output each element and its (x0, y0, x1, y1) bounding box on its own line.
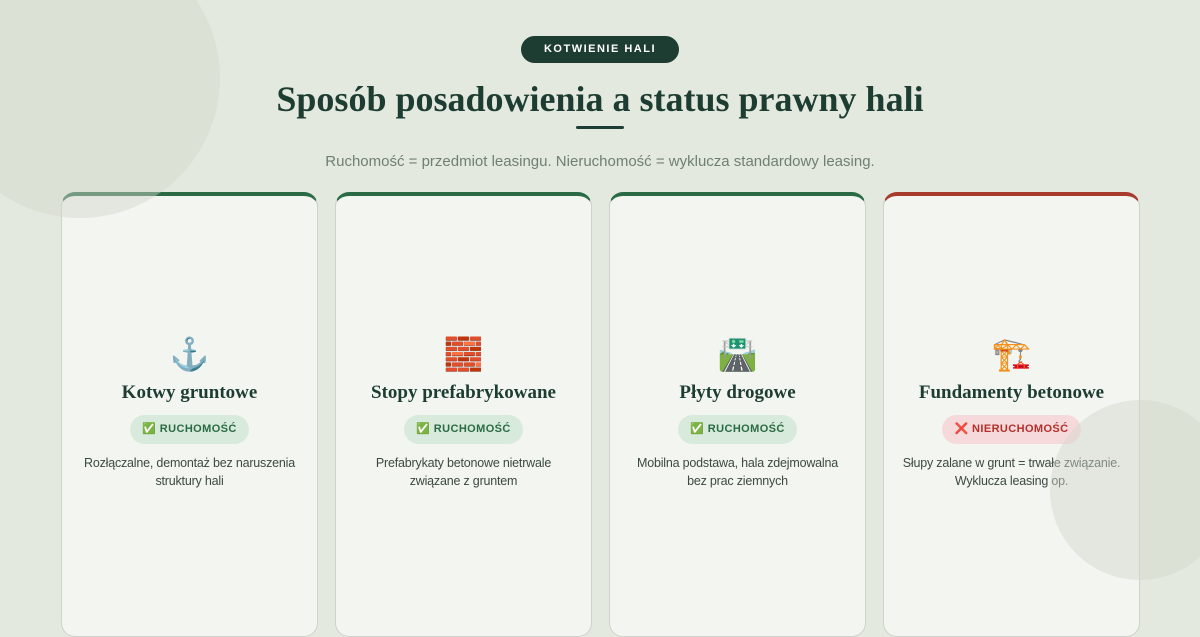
heading: Płyty drogowe (679, 382, 796, 403)
badge (678, 415, 797, 444)
badge (404, 415, 523, 444)
panel: płyty drogowe (609, 192, 866, 637)
description: Wyklucza leasing op. (955, 474, 1068, 488)
description: związane z gruntem (410, 474, 517, 488)
description (84, 456, 296, 488)
icon: road: 🛣️ (718, 336, 757, 372)
heading: Stopy prefabrykowane (371, 382, 556, 403)
description (376, 456, 551, 488)
badge: ✅ RUCHOMOŚĆ (416, 423, 511, 435)
description: Mobilna podstawa, hala zdejmowalna (637, 456, 838, 470)
heading: Fundamenty betonowe (919, 382, 1104, 403)
badge (942, 415, 1081, 444)
icon: anchor: ⚓ (170, 336, 209, 372)
title: Sposób posadowienia a status prawny hali (276, 79, 924, 119)
subtitle: Ruchomość = przedmiot leasingu. Nieruchomość = wyklucza standardowy leasing. (325, 153, 875, 170)
description: bez prac ziemnych (687, 474, 788, 488)
panel: stopy prefabrykowane (335, 192, 592, 637)
description: Rozłączalne, demontaż bez naruszenia (84, 456, 295, 470)
description: struktury hali (155, 474, 224, 488)
tag pill (521, 36, 679, 63)
panel: fundamenty betonowe (883, 192, 1140, 637)
icon: crane: 🏗️ (992, 336, 1031, 372)
badge: ❌ NIERUCHOMOŚĆ (954, 423, 1069, 435)
description: Prefabrykaty betonowe nietrwale (376, 456, 551, 470)
description (903, 456, 1120, 488)
badge: ✅ RUCHOMOŚĆ (142, 423, 237, 435)
decorative circle bottom-right (1050, 400, 1200, 580)
description (637, 456, 838, 488)
decorative circle top-left (0, 0, 220, 218)
icon: brick: 🧱 (444, 336, 483, 372)
badge (130, 415, 249, 444)
tag pill: KOTWIENIE HALI (544, 43, 656, 55)
description: Słupy zalane w grunt = trwałe związanie. (903, 456, 1120, 470)
panel: kotwy gruntowe (61, 192, 318, 637)
heading: Kotwy gruntowe (122, 382, 257, 403)
badge: ✅ RUCHOMOŚĆ (690, 423, 785, 435)
